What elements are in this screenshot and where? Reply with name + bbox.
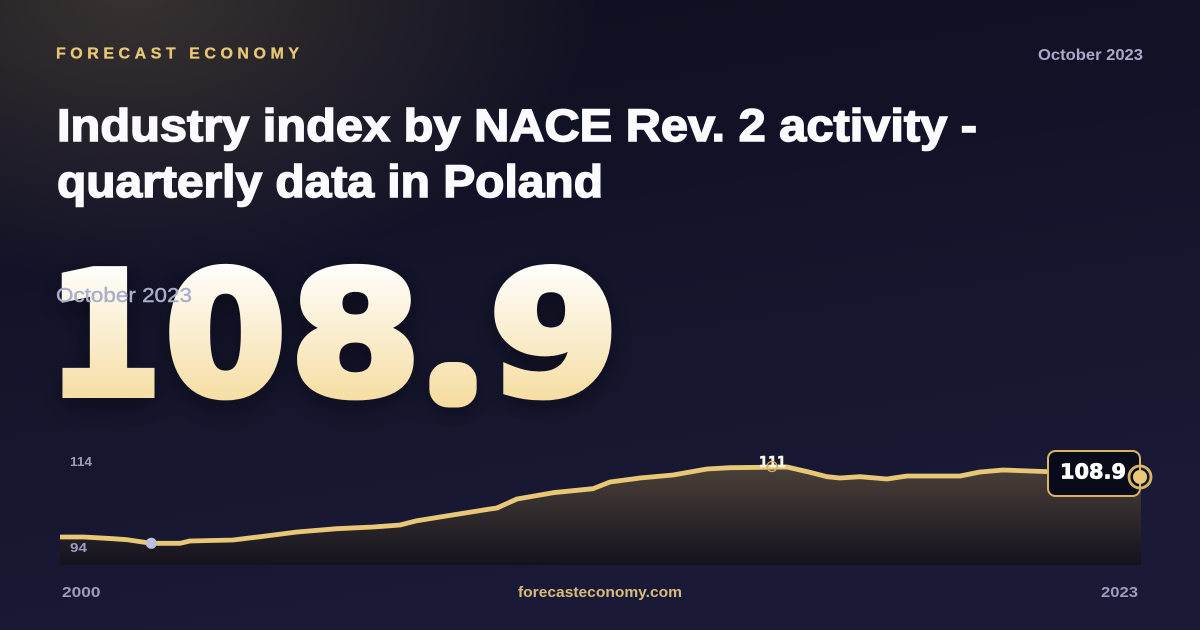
big value: 8 bbox=[290, 237, 421, 435]
title bbox=[57, 100, 977, 207]
big value: . bbox=[443, 344, 463, 402]
y axis min label: 94 bbox=[70, 540, 88, 555]
maximum label: 111 bbox=[759, 453, 786, 471]
line chart bbox=[60, 451, 1151, 565]
big value: 9 bbox=[489, 237, 619, 435]
eyebrow: brand: FORECAST ECONOMY bbox=[56, 46, 299, 62]
title: quarterly data in Poland bbox=[57, 156, 603, 207]
title: Industry index by NACE Rev. 2 activity - bbox=[57, 100, 977, 151]
latest value callout: 108.9 bbox=[1060, 460, 1126, 484]
latest value callout bbox=[1048, 451, 1140, 496]
latest point marker bbox=[1129, 466, 1151, 488]
x axis start label: 2000 bbox=[62, 585, 100, 601]
big value bbox=[47, 237, 619, 435]
y axis max label: 114 bbox=[70, 454, 93, 469]
big value: 0 bbox=[165, 237, 286, 435]
chart line bbox=[60, 467, 1060, 543]
maximum marker bbox=[767, 462, 777, 472]
chart area fill bbox=[60, 467, 1141, 565]
website: forecasteconomy.com bbox=[518, 585, 682, 601]
date overlapping value: October 2023 bbox=[56, 285, 192, 307]
x axis end label: 2023 bbox=[1101, 585, 1138, 601]
date top right: October 2023 bbox=[1038, 47, 1143, 64]
minimum marker bbox=[146, 538, 157, 549]
big value: 1 bbox=[47, 237, 162, 435]
